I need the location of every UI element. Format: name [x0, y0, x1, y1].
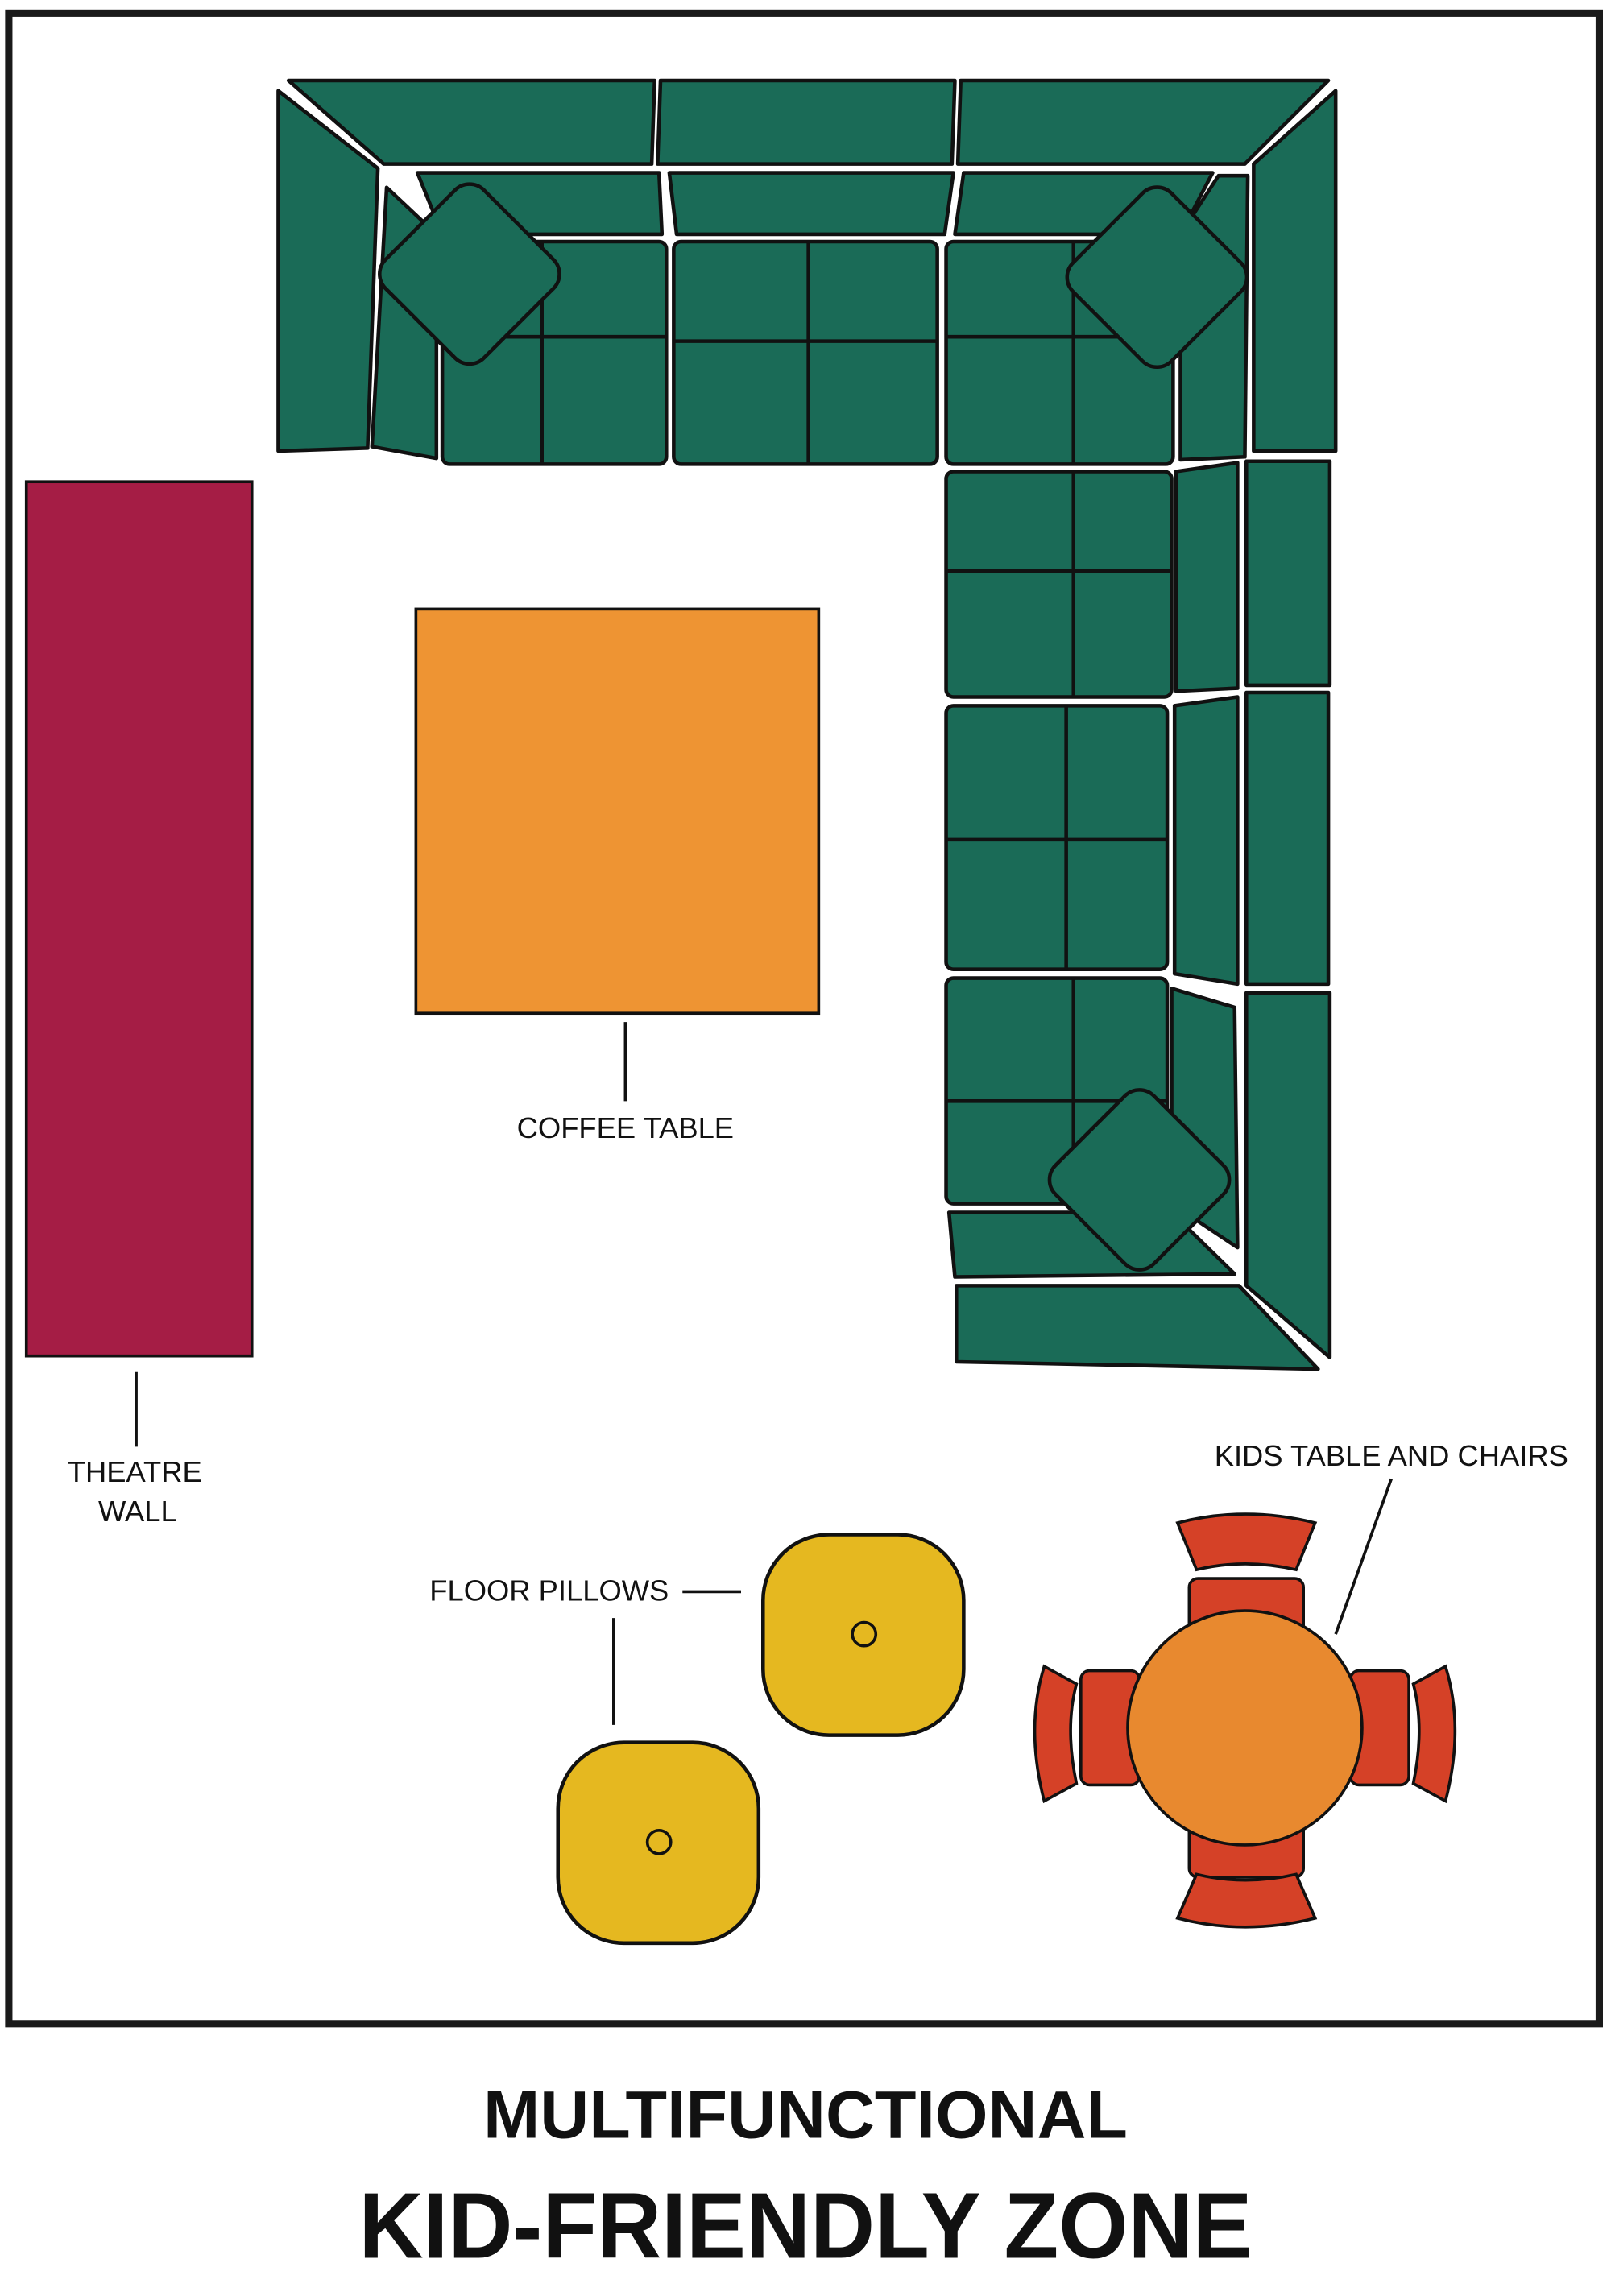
- right backs: [1253, 91, 1336, 451]
- left chair: [1081, 1671, 1140, 1785]
- floor pillow 1: [763, 1535, 963, 1735]
- right chair: [1350, 1671, 1409, 1785]
- theatre wall label: [68, 1372, 202, 1528]
- left arm: [278, 91, 378, 451]
- bottom chair: [1189, 1818, 1303, 1877]
- theatre wall: [27, 482, 252, 1356]
- inner right strips: [1176, 463, 1237, 691]
- pillows: [371, 176, 568, 372]
- coffee table label: COFFEE TABLE: [517, 1111, 734, 1144]
- sectional sofa: [278, 81, 1336, 1369]
- inner top cushions: [417, 173, 662, 234]
- coffee table: [416, 609, 818, 1013]
- kids table label: KIDS TABLE AND CHAIRS: [1215, 1439, 1568, 1472]
- seats: [442, 242, 666, 464]
- floor pillow 2: [558, 1743, 759, 1943]
- bottom back: [956, 1285, 1318, 1369]
- floor pillows label: FLOOR PILLOWS: [429, 1574, 669, 1607]
- title: [358, 2077, 1253, 2278]
- title: MULTIFUNCTIONAL: [483, 2077, 1128, 2153]
- kids table label: [1215, 1439, 1568, 1634]
- theatre wall label: THEATRE: [68, 1455, 202, 1488]
- theatre wall label: WALL: [98, 1495, 177, 1528]
- title: KID-FRIENDLY ZONE: [358, 2174, 1253, 2278]
- top chair: [1189, 1578, 1303, 1637]
- back cushions top: [288, 81, 655, 164]
- kids table and chairs: [1035, 1514, 1455, 1927]
- table: [1128, 1611, 1362, 1845]
